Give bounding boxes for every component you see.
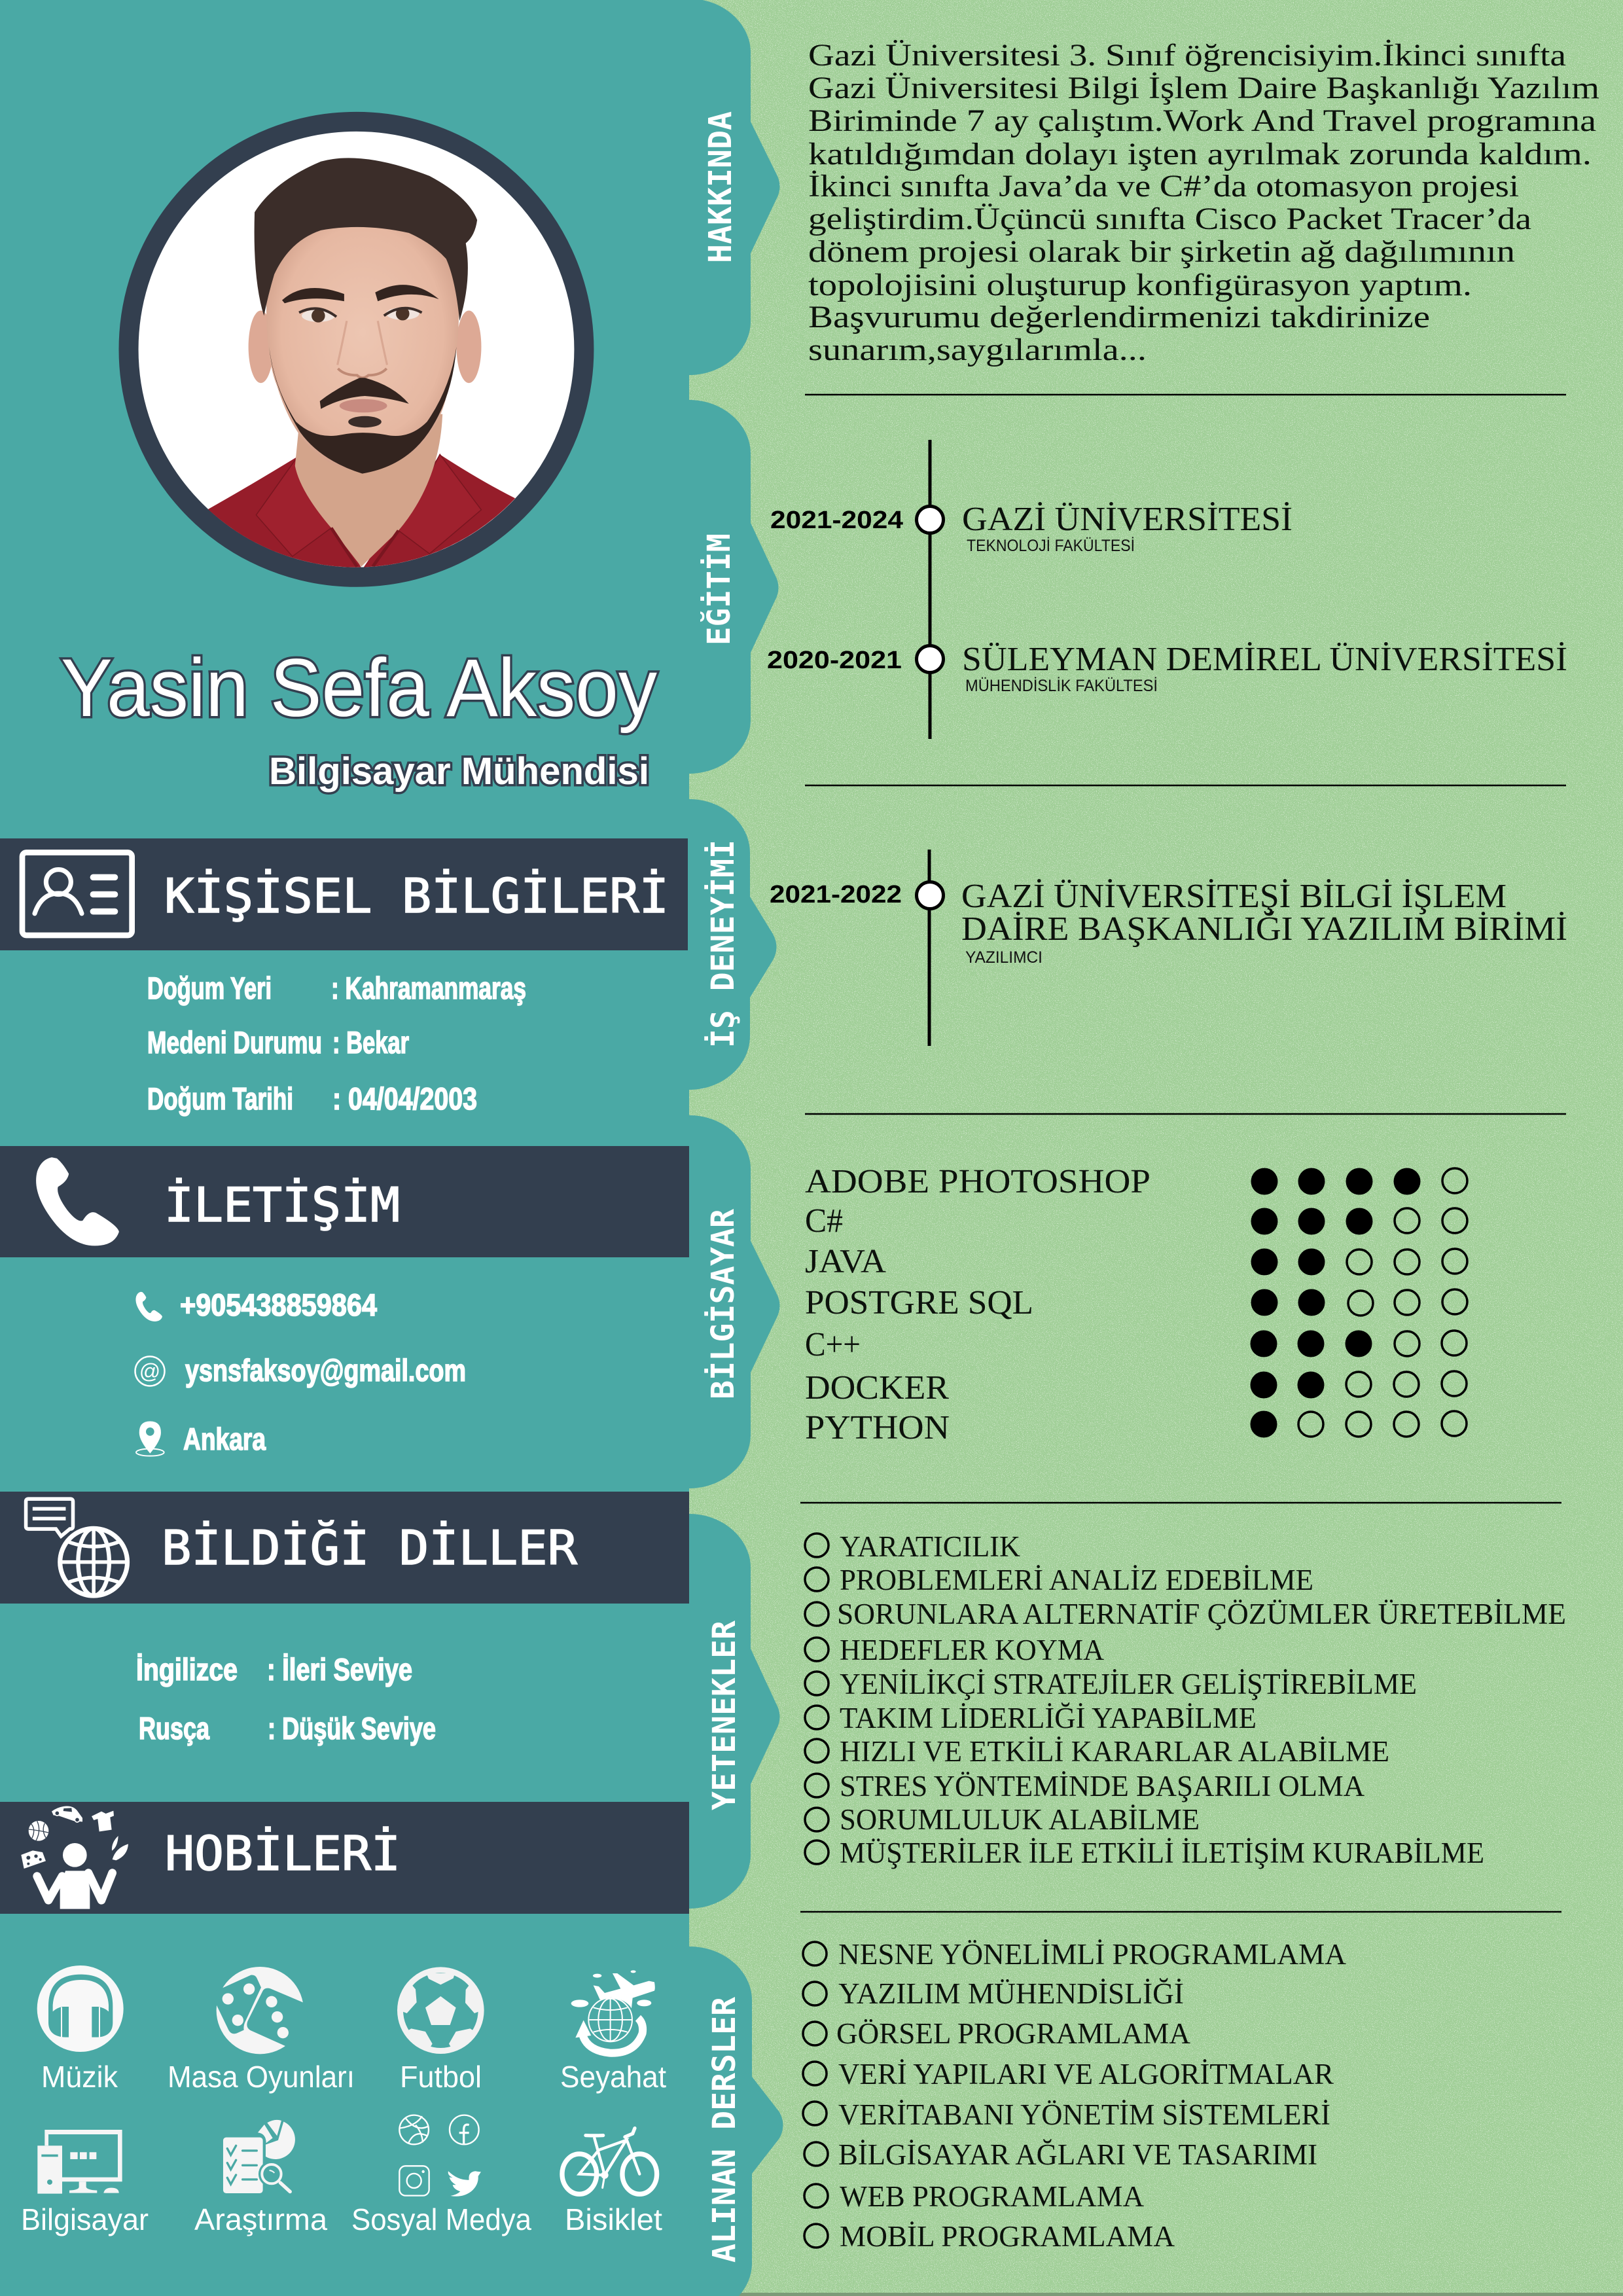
- icon: social media: [399, 2115, 481, 2197]
- text block: about: Gazi Üniversitesi 3. Sınıf öğrencisiyim.İkinci sınıfta: [808, 38, 1566, 73]
- abilities text: SORUMLULUK ALABİLME: [840, 1803, 1200, 1836]
- courses text: [836, 1938, 1347, 2253]
- entry: gazi bilgi islem: DAİRE BAŞKANLIĞI YAZILIM BİRİMİ: [961, 910, 1567, 948]
- icon: small phone: [135, 1292, 162, 1321]
- label: egitim: EĞİTİM: [700, 533, 738, 645]
- personal details: : 04/04/2003: [332, 1081, 477, 1116]
- personal details: Doğum Tarihi: [147, 1081, 293, 1116]
- skill rating dots: [1250, 1168, 1467, 1437]
- panel: left teal sidebar: [0, 0, 689, 2296]
- skill names: PYTHON: [805, 1409, 950, 1446]
- entry: gazi bilgi islem: YAZILIMCI: [965, 948, 1043, 967]
- personal details: : Bekar: [332, 1025, 409, 1060]
- section bar: kisisel bilgileri: [0, 838, 688, 950]
- courses text: YAZILIM MÜHENDİSLİĞİ: [838, 1977, 1184, 2010]
- work timeline: [770, 850, 1567, 1046]
- city: Ankara: [183, 1422, 266, 1456]
- icon: dice: [209, 1967, 310, 2054]
- abilities text: HEDEFLER KOYMA: [840, 1634, 1104, 1666]
- courses list: [803, 1938, 1347, 2253]
- text block: about: sunarım,saygılarımla...: [808, 332, 1147, 367]
- label: masa oyunlari: Masa Oyunları: [168, 2060, 355, 2094]
- text block: about: geliştirdim.Üçüncü sınıfta Cisco Packet Tracer’da: [808, 202, 1531, 236]
- tab: egitim: [689, 400, 779, 774]
- entry: gazi: TEKNOLOJİ FAKÜLTESİ: [967, 536, 1135, 555]
- computer skills list: [805, 1163, 1467, 1446]
- skill names: JAVA: [805, 1243, 886, 1280]
- label: futbol: Futbol: [400, 2060, 482, 2094]
- courses text: NESNE YÖNELİMLİ PROGRAMLAMA: [838, 1938, 1347, 1971]
- icon: juggling person: [21, 1806, 128, 1909]
- language levels: Rusça: [139, 1711, 210, 1746]
- entry: suleyman demirel: [767, 641, 1567, 695]
- icon: football: [397, 1967, 484, 2054]
- icon: phone: [36, 1157, 119, 1246]
- icon: travel globe and plane: [571, 1970, 655, 2053]
- label: hakkinda: HAKKINDA: [702, 111, 739, 263]
- abilities text: YARATICILIK: [840, 1530, 1020, 1563]
- entry: gazi bilgi islem: GAZİ ÜNİVERSİTEŞİ BİLGİ İŞLEM: [961, 878, 1507, 915]
- label: sosyal medya: Sosyal Medya: [351, 2202, 531, 2236]
- skill names: C#: [805, 1202, 843, 1240]
- icon: chat bubble and globe: [26, 1499, 128, 1596]
- entry: gazi: [770, 501, 1293, 555]
- hobbies grid: [21, 1965, 666, 2236]
- language levels: : Düşük Seviye: [268, 1711, 436, 1746]
- label: bisiklet: Bisiklet: [565, 2202, 662, 2236]
- text block: about: İkinci sınıfta Java’da ve C#’da otomasyon projesi: [808, 169, 1519, 204]
- skill names: [805, 1163, 1150, 1446]
- text block: about: Gazi Üniversitesi Bilgi İşlem Daire Başkanlığı Yazılım: [808, 71, 1599, 105]
- node: 2021-2022: [916, 882, 944, 908]
- entry: gazi: 2021-2024: [770, 507, 903, 534]
- courses text: GÖRSEL PROGRAMLAMA: [836, 2017, 1190, 2050]
- icon: research: [223, 2120, 295, 2193]
- icon: bicycle: [562, 2128, 657, 2194]
- personal details: [147, 971, 526, 1116]
- abilities text: SORUNLARA ALTERNATİF ÇÖZÜMLER ÜRETEBİLME: [837, 1598, 1566, 1630]
- tab: hakkinda: [689, 0, 780, 375]
- name: Yasin Sefa Aksoy: [61, 643, 657, 734]
- skill names: POSTGRE SQL: [805, 1284, 1033, 1321]
- text block: about: [808, 38, 1599, 367]
- personal details: Doğum Yeri: [147, 971, 272, 1005]
- abilities text: PROBLEMLERİ ANALİZ EDEBİLME: [840, 1564, 1313, 1596]
- text block: about: Başvurumu değerlendirmenizi takdirinize: [808, 300, 1430, 334]
- phone number: +905438859864: [180, 1287, 377, 1322]
- courses text: BİLGİSAYAR AĞLARI VE TASARIMI: [838, 2138, 1317, 2171]
- section bar: bildigi diller: [0, 1492, 689, 1604]
- skill names: C++: [805, 1326, 861, 1363]
- label: seyahat: Seyahat: [560, 2060, 666, 2094]
- tab: is deneyimi: [689, 799, 776, 1090]
- section bar: hobileri: [0, 1802, 689, 1914]
- icon: location pin: [136, 1422, 164, 1456]
- skill names: DOCKER: [805, 1369, 949, 1407]
- label: arastirma: Araştırma: [194, 2202, 327, 2236]
- abilities text: [837, 1530, 1566, 1869]
- icon: at sign: [135, 1356, 165, 1386]
- heading: kisisel bilgileri: KİŞİSEL BİLGİLERİ: [164, 869, 669, 924]
- job title: Bilgisayar Mühendisi: [269, 750, 649, 793]
- label: is deneyimi: İŞ DENEYİMİ: [704, 840, 741, 1048]
- node: 2021-2024: [916, 507, 944, 533]
- courses text: VERİTABANI YÖNETİM SİSTEMLERİ: [838, 2098, 1330, 2131]
- label: bilgisayar: BİLGİSAYAR: [704, 1209, 741, 1399]
- entry: suleyman demirel: SÜLEYMAN DEMİREL ÜNİVERSİTESİ: [962, 641, 1567, 678]
- language levels: İngilizce: [136, 1652, 238, 1687]
- section bar: iletisim: [0, 1146, 689, 1257]
- abilities text: TAKIM LİDERLİĞİ YAPABİLME: [840, 1702, 1257, 1734]
- entry: gazi bilgi islem: 2021-2022: [770, 881, 902, 908]
- abilities list: [805, 1530, 1566, 1869]
- icon: id card: [22, 852, 132, 935]
- personal details: Medeni Durumu: [147, 1025, 322, 1060]
- label: muzik: Müzik: [41, 2060, 118, 2094]
- abilities text: STRES YÖNTEMİNDE BAŞARILI OLMA: [840, 1770, 1364, 1803]
- courses text: WEB PROGRAMLAMA: [840, 2180, 1144, 2213]
- abilities text: HIZLI VE ETKİLİ KARARLAR ALABİLME: [840, 1735, 1389, 1768]
- tab: bilgisayar: [689, 1115, 780, 1488]
- tab: alinan dersler: [689, 1946, 783, 2296]
- email: ysnsfaksoy@gmail.com: [185, 1353, 466, 1388]
- entry: suleyman demirel: 2020-2021: [767, 647, 902, 674]
- tab: yetenekler: [689, 1514, 780, 1909]
- text block: about: katıldığımdan dolayı işten ayrılmak zorunda kaldım.: [808, 137, 1592, 171]
- text block: about: dönem projesi olarak bir şirketin ağ dağılımının: [808, 234, 1515, 269]
- node: 2020-2021: [916, 645, 944, 673]
- icon: music headphones: [37, 1965, 124, 2052]
- entry: gazi: GAZİ ÜNİVERSİTESİ: [962, 501, 1293, 538]
- education timeline: [767, 440, 1567, 739]
- language levels: : İleri Seviye: [267, 1652, 412, 1687]
- abilities text: YENİLİKÇİ STRATEJİLER GELİŞTİREBİLME: [840, 1668, 1417, 1700]
- entry: gazi bilgi islem: [770, 878, 1567, 967]
- language levels: [136, 1652, 436, 1746]
- icon: computer: [37, 2130, 122, 2194]
- heading: hobileri: HOBİLERİ: [165, 1826, 401, 1881]
- heading: iletisim: İLETİŞİM: [164, 1177, 400, 1232]
- personal details: : Kahramanmaraş: [331, 971, 526, 1005]
- label: bilgisayar: Bilgisayar: [21, 2202, 149, 2236]
- label: alinan dersler: ALINAN DERSLER: [706, 1997, 743, 2263]
- text block: about: Biriminde 7 ay çalıştım.Work And Travel programına: [808, 103, 1596, 138]
- abilities text: MÜŞTERİLER İLE ETKİLİ İLETİŞİM KURABİLME: [840, 1837, 1484, 1869]
- text block: about: topolojisini oluşturup konfigürasyon yaptım.: [808, 268, 1472, 302]
- entry: suleyman demirel: MÜHENDİSLİK FAKÜLTESİ: [965, 676, 1158, 695]
- heading: bildigi diller: BİLDİĞİ DİLLER: [162, 1520, 578, 1575]
- courses text: MOBİL PROGRAMLAMA: [840, 2220, 1175, 2253]
- label: yetenekler: YETENEKLER: [706, 1621, 743, 1810]
- courses text: VERİ YAPILARI VE ALGORİTMALAR: [838, 2058, 1334, 2090]
- contact details: [135, 1287, 466, 1456]
- portrait photo in circular frame: [129, 122, 584, 590]
- icon: at sign: @: [139, 1359, 160, 1383]
- skill names: ADOBE PHOTOSHOP: [805, 1163, 1150, 1200]
